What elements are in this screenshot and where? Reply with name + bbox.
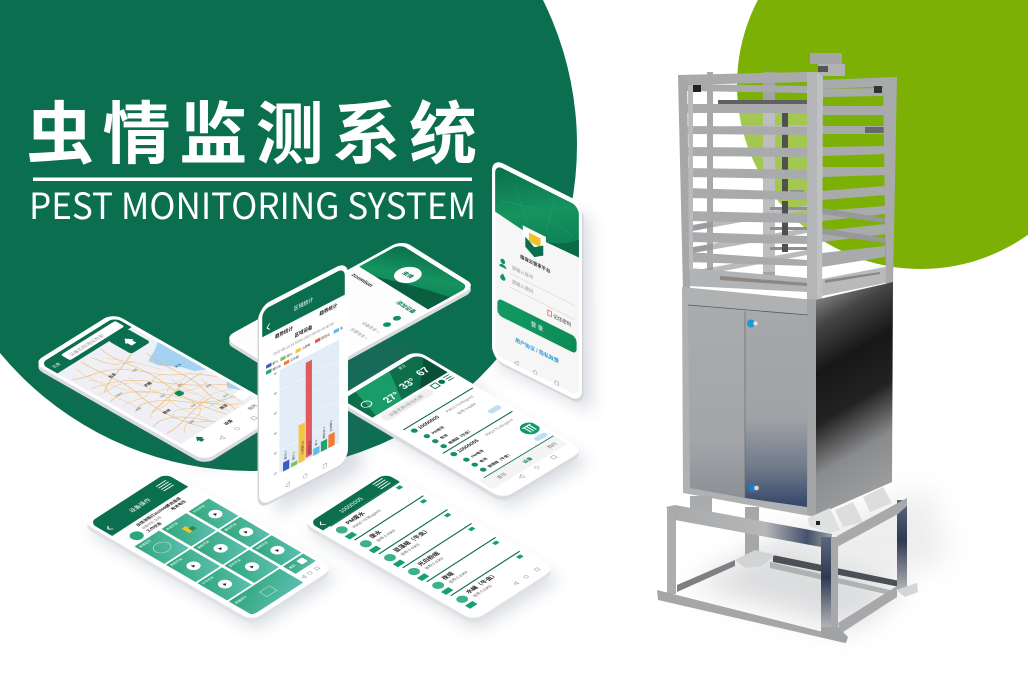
machine: pest monitoring device xyxy=(657,53,950,643)
device cards: 微雨级（牛虫） xyxy=(447,429,474,445)
legend: 猿叶 xyxy=(287,350,293,359)
phone: map: 我的 xyxy=(246,403,260,411)
cage tray xyxy=(689,266,890,296)
map area: 阜阳 xyxy=(189,403,197,408)
phone: device data: 设备 xyxy=(521,456,535,465)
tile grid xyxy=(135,498,327,615)
map area: 安阳 xyxy=(135,406,143,411)
phone: device home (back) xyxy=(229,243,471,363)
phone: map: 设备 xyxy=(222,418,236,426)
bottom nav xyxy=(181,398,278,457)
map area: 天津 xyxy=(131,368,139,373)
legend: 棉铃虫 xyxy=(272,362,282,372)
base front rail xyxy=(657,590,847,643)
device cards: 电池 xyxy=(438,433,449,440)
list rows: PM10:73.85ug/m3 xyxy=(351,508,383,529)
list rows: 信号:0.6369 xyxy=(375,529,397,542)
phone: map: 设备名称/地址检索 xyxy=(67,333,107,357)
logo xyxy=(520,224,550,275)
cage corner posts xyxy=(678,72,897,303)
header: 设备操作 xyxy=(127,497,153,514)
tile grid: 定时开关 xyxy=(227,558,243,568)
cage right rails xyxy=(822,77,895,267)
chart: 40 xyxy=(274,411,277,416)
device cards: 10000005 xyxy=(456,439,481,454)
weather header: 33° xyxy=(396,377,420,391)
weather header: 武汉 xyxy=(397,364,408,370)
legend: 甜菜夜 xyxy=(321,331,331,341)
agreement links: 用户协议 / 隐私政策 xyxy=(515,336,559,366)
support stand xyxy=(657,487,918,643)
title: English subheading: PEST MONITORING SYSTEM xyxy=(29,178,476,230)
search bar xyxy=(61,321,125,360)
mount plates xyxy=(808,508,840,533)
tile grid: 拍照开关 xyxy=(254,540,270,550)
lower lock xyxy=(748,484,759,492)
login form: 请输入账号 xyxy=(512,264,534,282)
login form: 请输入密码 xyxy=(512,278,534,296)
black centre rod xyxy=(782,112,788,252)
map area: 临沂 xyxy=(176,382,185,387)
floor shadow xyxy=(690,490,950,630)
list rows: 信号:0.6369 xyxy=(423,556,445,570)
corner leg xyxy=(821,537,831,627)
device cards: PM10:73.85ug/m3 xyxy=(484,419,514,437)
map area: 石家庄 xyxy=(114,391,124,398)
translucent glass panel xyxy=(713,113,807,272)
left leg xyxy=(667,507,676,594)
phone: bar chart: 趋势统计 xyxy=(320,302,337,318)
device info xyxy=(130,497,186,540)
list rows: 蓝藻蛾（牛虫） xyxy=(391,527,433,553)
header: 区域统计 xyxy=(294,295,314,313)
phone: device data: 设备名称/地址检索 xyxy=(386,394,426,418)
cage front rails xyxy=(678,72,807,266)
map area: 扬州 xyxy=(222,393,230,398)
cabinet xyxy=(682,282,893,517)
list rows: 水蝇（牛虫） xyxy=(463,572,500,595)
phone: bar chart xyxy=(258,261,348,510)
legend: 黑 xyxy=(340,325,344,331)
chart: 甜菜夜:33 xyxy=(307,439,312,455)
upper lock xyxy=(747,320,758,328)
chart: 30 xyxy=(274,431,277,436)
list rows: 夜蛾 xyxy=(439,571,456,581)
phone: bar chart: 2021-09-13 14:53:00-2021-09-20 15:00:00 xyxy=(273,321,334,357)
tile grid: 摄像开关 xyxy=(195,539,211,549)
bottom nav xyxy=(483,435,554,478)
chart: 10 xyxy=(274,471,277,476)
top front rail xyxy=(666,505,832,549)
cage back frame xyxy=(687,72,807,278)
top right rail xyxy=(837,498,907,547)
bracket centre xyxy=(735,550,775,568)
legend: 小菜蛾 xyxy=(302,341,311,351)
side bracket xyxy=(896,583,918,597)
title: Chinese heading: 虫情监测系统 xyxy=(26,79,486,178)
weather header xyxy=(342,354,448,418)
cabinet right side xyxy=(815,282,893,516)
weather header: 27° xyxy=(380,390,404,405)
map area: 菏泽 xyxy=(159,393,167,398)
tile grid: 补光开关 xyxy=(191,503,207,513)
base right rail xyxy=(838,586,897,634)
right door xyxy=(745,311,808,507)
tile grid: 重启 xyxy=(287,563,297,569)
header with logo xyxy=(359,244,469,310)
list rows: 信号:0.6369 xyxy=(471,584,493,598)
list rows: 废水 xyxy=(367,529,384,539)
tile grid: 水平开关 xyxy=(200,575,216,585)
soft phone shadows xyxy=(40,175,592,630)
search xyxy=(381,389,433,420)
nav keys xyxy=(513,582,519,585)
right leg xyxy=(897,500,907,590)
list rows: PM废水 xyxy=(343,510,367,526)
device cards xyxy=(403,387,551,476)
nav keys xyxy=(514,360,518,367)
tile grid: 杀虫开关 xyxy=(164,521,180,531)
left door xyxy=(688,305,745,498)
phone: device control tiles xyxy=(88,476,328,622)
login button xyxy=(497,298,577,354)
header xyxy=(309,473,399,531)
chart: 60 xyxy=(274,371,277,376)
device info: 开启温度 xyxy=(163,496,182,508)
logo: 植保云管家平台 xyxy=(520,253,550,275)
phone: device home (back): zoomlion xyxy=(349,273,375,288)
device cards: PM电池 xyxy=(469,449,485,458)
login form xyxy=(499,257,575,330)
device cards: 电池 xyxy=(478,457,489,463)
chart: 蓟马:2 xyxy=(283,449,287,461)
phone: login xyxy=(492,158,584,406)
chart: 棉铃虫:2 xyxy=(321,426,326,440)
header with logo: 虫情 xyxy=(400,270,416,280)
phone: device list xyxy=(308,476,550,621)
login form: 记住密码 xyxy=(553,313,571,329)
device info: 虫情测报灯20200808 xyxy=(134,503,172,527)
lime background circle xyxy=(737,0,1028,269)
tile grid: 数据统计 xyxy=(233,594,249,604)
device info: 工作状态 xyxy=(144,521,163,533)
phone: device home (back): 设备信息 > xyxy=(359,321,383,334)
device cards: PM10:73.85ug/m3 xyxy=(445,395,475,413)
nav keys xyxy=(286,482,289,489)
chart xyxy=(274,339,339,476)
map area: 黄海 xyxy=(173,362,183,369)
cabinet front xyxy=(682,287,815,517)
header xyxy=(262,268,345,337)
tile grid: 雨控开关 xyxy=(168,557,184,567)
chart: 20 xyxy=(274,451,277,456)
chart: 黑:2 xyxy=(314,439,318,446)
header xyxy=(40,317,132,374)
phone: map xyxy=(38,316,258,462)
back leg xyxy=(745,507,759,555)
device info: 设备状态 在线 xyxy=(140,515,163,530)
weather header: 67 xyxy=(413,366,434,378)
map area: 盐城 xyxy=(205,383,213,388)
map area: 北京 xyxy=(107,372,118,379)
map area: 郑州 xyxy=(161,408,172,415)
device cards: 10000005 xyxy=(417,415,442,430)
tile grid: 虫情监测 xyxy=(137,538,153,548)
login button: 登 录 xyxy=(531,319,543,334)
device info: 电池电压 xyxy=(168,499,187,511)
base rails back xyxy=(677,560,735,592)
map area xyxy=(56,326,256,444)
green background circle xyxy=(0,0,577,471)
chart: 玉米螟:3 xyxy=(328,419,333,433)
title divider xyxy=(33,178,472,181)
chart: 小菜蛾:10 xyxy=(300,440,304,456)
floating tab xyxy=(110,330,149,354)
top sensor box xyxy=(810,53,845,76)
map area: 南京 xyxy=(218,403,229,410)
device cards: 信号:0.6369 xyxy=(456,402,477,415)
corner strip xyxy=(807,299,816,516)
legend xyxy=(266,324,344,375)
phone: device home (back): 添加设备 xyxy=(393,300,419,315)
list rows xyxy=(328,482,541,609)
subtitle: 区域设备 xyxy=(295,323,312,340)
device cards: 微雨级（牛虫） xyxy=(486,452,513,468)
map area: 济南 xyxy=(142,381,153,388)
header xyxy=(495,164,579,259)
map area: 信阳 xyxy=(188,419,196,424)
phone: device home (back): 告警信息 > xyxy=(348,327,371,341)
phone: device data xyxy=(348,353,578,500)
floating action icon xyxy=(520,422,540,434)
legend: 蓟马 xyxy=(272,358,278,366)
header xyxy=(89,473,188,536)
header: 10000005 xyxy=(338,497,366,514)
chart: 猿叶:1 xyxy=(291,450,295,461)
list rows: 信号:0.6369 xyxy=(399,543,421,556)
tile grid: 震动开关 xyxy=(223,522,239,532)
nav keys xyxy=(301,575,307,579)
legend: 玉米螟 xyxy=(290,353,299,363)
list rows: 信号:0.6369 xyxy=(447,570,469,584)
phone: map: 北京 xyxy=(50,361,64,369)
tabs: 趋势统计 xyxy=(275,325,293,341)
chart: 50 xyxy=(274,391,277,396)
list rows: 光白粉蛾 xyxy=(415,550,442,567)
phone: device data: 我的 xyxy=(545,441,559,450)
device cards: PM电池 xyxy=(430,425,446,435)
phone: device data: 首页 xyxy=(495,472,509,480)
